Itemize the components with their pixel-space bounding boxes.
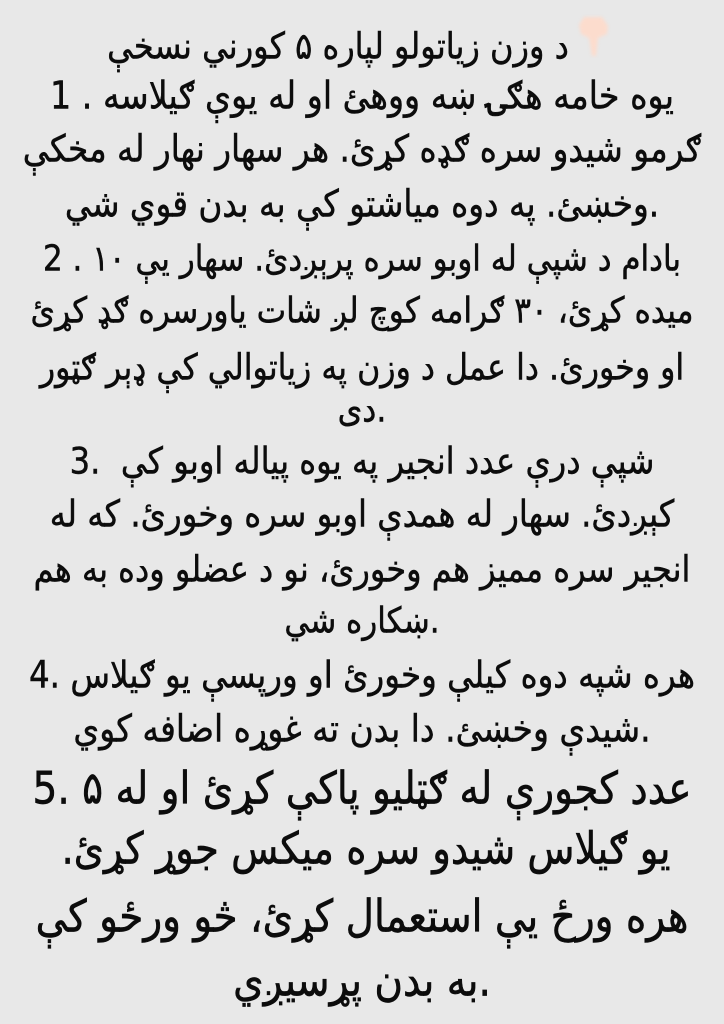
icon: faded pointing hand [578,16,608,56]
recipe 3 text [34,439,690,642]
recipe 1 text: یوه خامه هګۍ ښه ووهئ او له یوې ګیلاسه . 1 [50,73,674,118]
recipe 2 text [30,238,694,431]
recipe 5 text: عدد کجورې له ګټلیو پاکې کړئ او له ۵ .5 [33,764,691,815]
recipe 1 text: .وخښئ. په دوه میاشتو کې به بدن قوي شي [65,182,659,226]
recipe 4 text [29,653,695,756]
recipe 1 text: ګرمو شیدو سره ګډه کړئ. هر سهار نهار له مخکې [23,127,701,171]
recipe 3 text: شپې درې عدد انجیر په یوه پیاله اوبو کې .3 [70,439,654,483]
recipe 5 text: یو ګیلاس شیدو سره میکس جوړ کړئ. [62,824,670,875]
title: د وزن زیاتولو لپاره ۵ کورني نسخې [107,24,569,68]
recipe 4 text: .شیدې وخښئ. دا بدن ته غوړه اضافه کوي [73,706,651,751]
recipe 3 text: کېږدئ. سهار له همدې اوبو سره وخورئ. که له [50,492,674,536]
recipe 3 text: .ښکاره شي [284,600,440,642]
recipe 2 text: بادام د شپې له اوبو سره پرېږدئ. سهار یې ۱۰ . 2 [43,238,681,280]
recipe 5 text: .به بدن پړسیږي [233,956,491,1007]
recipe 4 text: هره شپه دوه کیلې وخورئ او ورپسې یو ګیلاس .4 [29,653,695,697]
recipe 1 text [23,73,702,231]
recipe 2 text: او وخورئ. دا عمل د وزن په زیاتوالي کې ډېر ګټور [40,347,684,389]
recipe 2 text: میده کړئ، ۳۰ ګرامه کوچ لږ شات یاورسره ګډ کړئ [30,290,694,332]
recipe 3 text: انجیر سره ممیز هم وخورئ، نو د عضلو وده به هم [34,547,690,591]
recipe 5 text: هره ورځ یې استعمال کړئ، څو ورځو کې [36,892,688,943]
recipe 2 text: .دی [338,389,386,431]
